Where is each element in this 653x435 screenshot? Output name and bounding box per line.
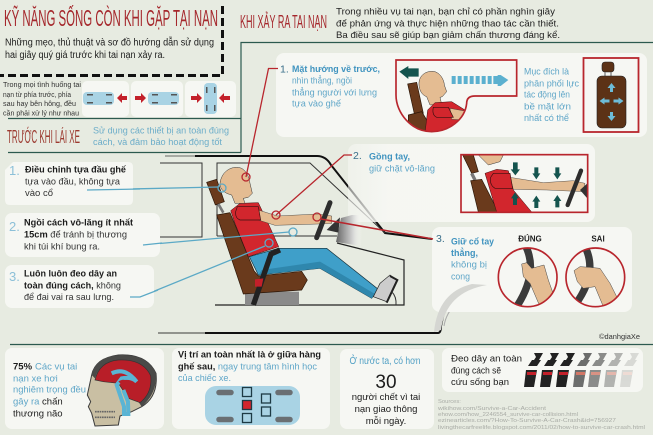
bottom card: seat belt saves — [442, 348, 643, 392]
right step 3 text: 3. — [436, 233, 445, 245]
sleeve — [236, 207, 261, 220]
small note on crash directions: nạn từ phía trước, phía — [3, 92, 71, 99]
sources: Sources: — [438, 399, 461, 405]
sources: ezinearticles.com/?How-To-Survive-A-Car-Crash&id=756927 — [438, 418, 616, 424]
left card 3: seat belt: toàn đúng cách, không — [24, 280, 121, 292]
intro: when accident happens: Trong nhiều vụ tai nạn, bạn chỉ có phần nghìn giây — [336, 6, 555, 18]
callouts red — [242, 68, 433, 239]
bottom card: seat belt saves: cứu sống bạn — [451, 377, 509, 388]
right step 3 text: thẳng, — [451, 247, 478, 259]
head — [220, 167, 252, 203]
right step 1 text: Mặt hướng về trước, — [292, 64, 380, 75]
left card 2: distance — [5, 213, 160, 257]
bottom card: daily deaths: Ở nước ta, có hơn — [350, 354, 420, 367]
right step 1 text: tựa vào ghế — [292, 98, 342, 110]
steering wheel — [317, 203, 330, 238]
left card 3: seat belt: 3. — [9, 269, 20, 284]
force distribution text: tác động lên — [524, 90, 570, 100]
subheading: before driving: cách, và đảm bảo hoạt động tốt — [93, 137, 223, 147]
skull and brain icon — [87, 355, 156, 426]
steering column — [327, 217, 340, 233]
text: TRƯỚC KHI LÁI XE — [7, 126, 80, 147]
small note on crash directions: Trong mọi tình huống tai — [3, 80, 81, 89]
left card 2: distance: 2. — [9, 219, 20, 234]
dashboard gradient — [336, 215, 362, 246]
car body outline — [158, 156, 487, 333]
crash diagram: front — [82, 81, 129, 117]
intro text: Những mẹo, thủ thuật và sơ đồ hướng dẫn sử dụng — [5, 36, 214, 48]
force distribution text: Mục đích là — [524, 66, 570, 78]
wrist circles — [498, 247, 625, 307]
right step 1 text: thẳng người với lưng — [292, 86, 377, 98]
right step 3 text: Giữ cổ tay — [451, 236, 495, 248]
arrow: force forward — [452, 75, 508, 86]
small note on crash directions: sau hay bên hông, đều — [3, 99, 76, 108]
right step 2 text: Gồng tay, — [369, 152, 410, 162]
fading rear of roof and floor — [155, 155, 205, 334]
left card 1: headrest — [5, 162, 133, 205]
left card 2: distance: Ngồi cách vô-lăng ít nhất — [24, 218, 134, 228]
sources: livingthecarfreelife.blogspot.com/2011/02/how-to-survive-car-crash.html — [438, 425, 645, 431]
intro text — [5, 36, 214, 61]
driver illustration — [207, 167, 397, 305]
card: front-right white panels — [276, 53, 647, 312]
right step 1 text — [280, 64, 380, 110]
bottom card: brain injury: 75% — [13, 362, 33, 372]
sources: ehow.com/how_2246554_survive-car-collision.html — [438, 412, 578, 418]
small note on crash directions: cần phải xử lý như nhau — [3, 108, 79, 118]
right step 3 text: không bị — [451, 260, 487, 270]
right step 3 text — [436, 233, 495, 282]
car seat plan icon — [205, 386, 300, 425]
head-forward illustration — [396, 60, 517, 133]
legs — [249, 248, 378, 298]
blue line over card 2 — [143, 243, 162, 245]
label: wrong: SAI — [591, 234, 605, 244]
right step 2 text: 2. — [353, 150, 362, 162]
copyright: ©danhgiaXe — [599, 332, 640, 341]
bottom card: brain injury: thương não — [13, 408, 63, 420]
sources: wikihow.com/Survive-a-Car-Accident — [437, 406, 546, 412]
left card 2: distance: 15cm để tránh bị thương — [24, 230, 127, 240]
bottom card: safest seat: Vị trí an toàn nhất là ở giữa hàng — [178, 350, 321, 360]
lower car corner gradient — [434, 284, 487, 332]
bottom card: seat belt saves: đúng cách sẽ — [451, 366, 501, 376]
force distribution text: bề mặt lớn — [524, 102, 571, 112]
left card 3: seat belt — [5, 265, 154, 308]
small note on crash directions — [3, 80, 81, 118]
subheading: before driving — [93, 126, 229, 147]
correct wrist — [498, 247, 557, 307]
right step 1 text: nhìn thẳng, ngồi — [292, 74, 352, 86]
seat force icon — [584, 58, 638, 132]
left card 1: headrest: 1. — [9, 163, 20, 178]
intro: when accident happens: Ba điều sau sẽ giúp bạn giảm chấn thương đáng kể. — [336, 30, 560, 41]
crash diagram: rear — [131, 81, 183, 117]
left card 3: seat belt: để đai vai ra sau lưng. — [24, 292, 114, 303]
wrong wrist — [566, 247, 625, 307]
subheading: before driving: Sử dụng các thiết bị an toàn đúng — [93, 126, 229, 136]
crash diagram: side — [185, 81, 236, 117]
right step 3 text: cong — [451, 272, 470, 282]
force distribution text: phân phối lực — [524, 78, 579, 90]
right step 2 text — [353, 150, 435, 174]
label: correct: ĐÚNG — [518, 234, 542, 244]
blue line over card 1 — [87, 189, 140, 190]
intro text: hai giây quý giá trước khi tai nạn xảy ra. — [5, 50, 165, 61]
bottom card: safest seat: ghế sau, ngay trung tâm hình học — [178, 362, 317, 372]
left card 2: distance: khi túi khí bung ra. — [24, 242, 100, 252]
text: KHI XẢY RA TAI NẠN — [240, 11, 327, 32]
bottom card: brain injury — [5, 348, 164, 429]
intro: when accident happens — [336, 6, 560, 41]
bottom card: brain injury: gây ra chấn — [13, 396, 63, 408]
force distribution text — [524, 66, 579, 124]
left card 1: headrest: tựa vào đầu, không tựa — [25, 176, 121, 188]
bottom card: daily deaths: nạn giao thông — [355, 404, 417, 415]
bottom card: brain injury: nghiêm trọng đều — [13, 384, 86, 396]
bottom card: seat belt saves: Đeo dây an toàn — [451, 354, 522, 364]
torso — [231, 203, 279, 257]
callouts blue — [87, 184, 297, 297]
seat — [207, 179, 307, 305]
bottom card: daily deaths: người chết vì tai — [352, 392, 420, 403]
bottom card: daily deaths: mỗi ngày. — [366, 416, 406, 427]
sources — [437, 399, 645, 431]
dashed frame — [0, 6, 222, 76]
arrow: head moves back — [399, 66, 419, 79]
force distribution text: nhất có thể — [524, 113, 569, 124]
bottom card: brain injury: nạn xe hơi — [13, 374, 58, 384]
bottom card: brain injury: Các vụ tai — [35, 362, 77, 372]
shoe and pedal — [373, 275, 397, 305]
bottom card: safest seat — [172, 348, 330, 429]
right step 1 text: 1. — [280, 64, 289, 76]
seat belt pictogram row — [524, 353, 639, 387]
arrows: bracing forces — [511, 162, 561, 208]
section frame lines — [8, 42, 653, 344]
right step 2 text: giữ chặt vô-lăng — [369, 164, 435, 174]
left card 1: headrest: vào cổ — [25, 188, 53, 199]
arm — [258, 210, 332, 225]
braced arm illustration — [461, 155, 588, 212]
left card 1: headrest: Điều chỉnh tựa đầu ghế — [25, 164, 127, 176]
intro: when accident happens: để phản ứng và thực hiện những thao tác cần thiết. — [336, 18, 559, 30]
bottom card: safest seat: của chiếc xe. — [178, 373, 231, 384]
blue line over card 3 — [130, 290, 158, 297]
bottom card: daily deaths — [340, 349, 434, 429]
text: KỸ NĂNG SỐNG CÒN KHI GẶP TẠI NẠN — [4, 4, 218, 31]
left card 3: seat belt: Luôn luôn đeo dây an — [24, 268, 117, 280]
bottom card: daily deaths: 30 — [375, 372, 397, 393]
seat belt — [253, 250, 280, 305]
